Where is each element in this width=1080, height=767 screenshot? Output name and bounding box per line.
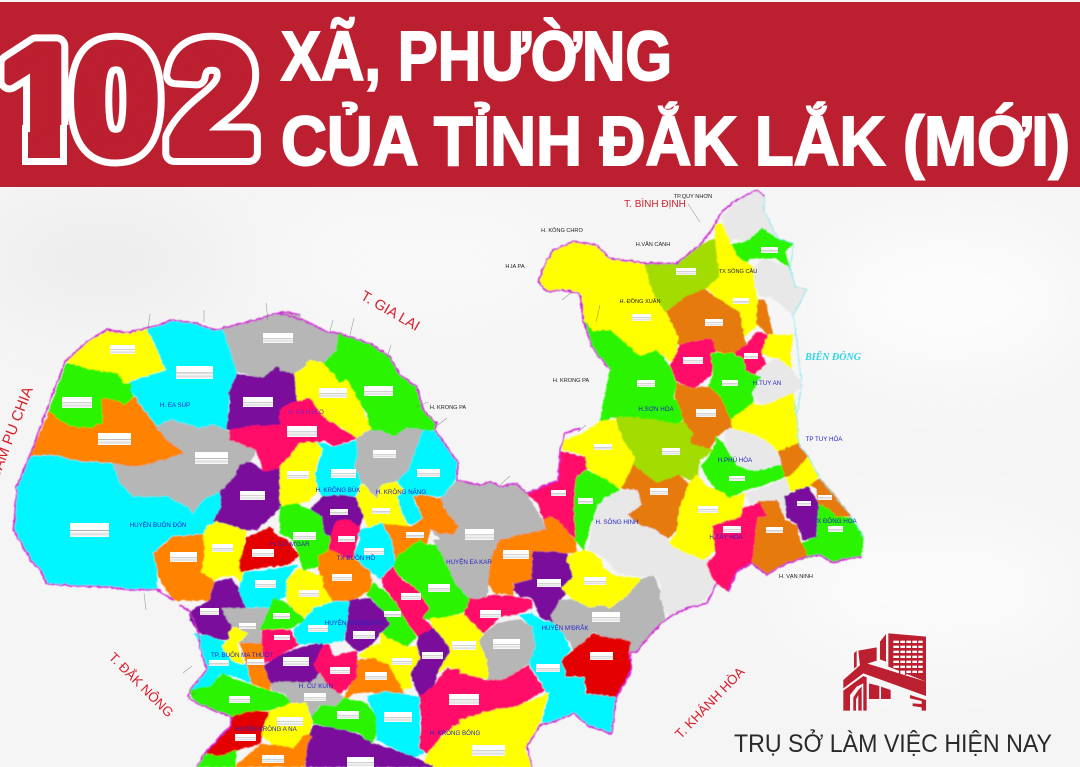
map labels: districts: H. EA SÚP [160, 402, 190, 409]
logo: caption: TRỤ SỞ LÀM VIỆC HIỆN NAY [734, 728, 1052, 758]
big number 102: 0 [73, 13, 159, 186]
map labels: districts: TX SÔNG CẦU [719, 268, 757, 275]
big number 102: 1 [0, 13, 85, 186]
map labels: districts: H. EA H'LEO [288, 409, 324, 416]
map labels: districts [130, 194, 858, 737]
label: T. Khánh Hòa: T. KHÁNH HÒA [672, 664, 748, 742]
label: sea: BIỂN ĐÔNG [804, 350, 862, 363]
map: neighbouring district lines [144, 204, 700, 700]
map labels: districts: HUYỆN EA KAR [446, 558, 492, 566]
label: T. Bình Định: T. BÌNH ĐỊNH [624, 197, 686, 210]
map labels: districts: H.TÂY HÒA [709, 534, 743, 541]
map labels: districts: H.PHÚ HÒA [718, 457, 753, 464]
big number 102 [0, 32, 261, 166]
map labels: districts: TX ĐÔNG HÒA [813, 518, 858, 525]
logo: building icon [843, 633, 926, 711]
map labels: districts: H. KRONG PA [553, 378, 589, 384]
big number 102: 0 [73, 13, 159, 186]
map labels: districts: H. KRÔNG BÚK [315, 487, 361, 494]
map labels: districts: H. ĐỒNG XUÂN [619, 298, 661, 305]
label: T. Đắk Nông: T. ĐẮK NÔNG [106, 649, 177, 720]
map labels: districts: TX BUÔN HỒ [337, 555, 375, 562]
label: T. Gia Lai: T. GIA LAI [358, 288, 422, 335]
big number 102: 2 [169, 13, 255, 186]
map labels: districts: HUYỆN KRÔNG A NA [235, 725, 298, 733]
map labels: districts: H. VẠN NINH [779, 574, 813, 580]
map labels: districts: H. KRONG PA [430, 405, 466, 411]
map labels: districts: H.SƠN HÒA [638, 406, 674, 413]
map labels: districts: H.VÂN CANH [636, 241, 670, 248]
map labels: districts: H.IA PA [505, 264, 525, 270]
map labels: districts: TP TUY HÒA [806, 436, 843, 443]
header band [0, 2, 1080, 187]
big number 102: 2 [169, 13, 255, 186]
map labels: districts: HUYỆN M'ĐRẮK [542, 624, 589, 632]
title line 1: XÃ, PHƯỜNG [281, 17, 672, 95]
map labels: districts: H. SÔNG HINH [596, 519, 638, 526]
map labels: districts: HUYỆN KRÔNG PẮC [325, 619, 386, 627]
map: commune data tables [62, 247, 843, 767]
map labels: districts: TP.QUY NHƠN [674, 194, 712, 200]
map labels: districts: H. CƯ KUIN [299, 683, 333, 690]
map: districts of Dak Lak [13, 190, 863, 767]
map labels: districts: HUYỆN BUÔN ĐÔN [130, 521, 186, 529]
map: provincial boundary [13, 190, 863, 767]
map labels: districts: H. KÔNG CHRO [541, 227, 583, 234]
map labels: districts: H.TUY AN [753, 380, 781, 387]
map labels: districts: H. KRÔNG BÔNG [430, 730, 480, 737]
map labels: districts: H. KRÔNG NĂNG [376, 489, 426, 496]
big number 102: 1 [0, 13, 85, 186]
map labels: districts: H. CƯ M'GAR [270, 541, 310, 548]
map labels: districts: TP. BUÔN MA THUỘT [211, 652, 273, 659]
